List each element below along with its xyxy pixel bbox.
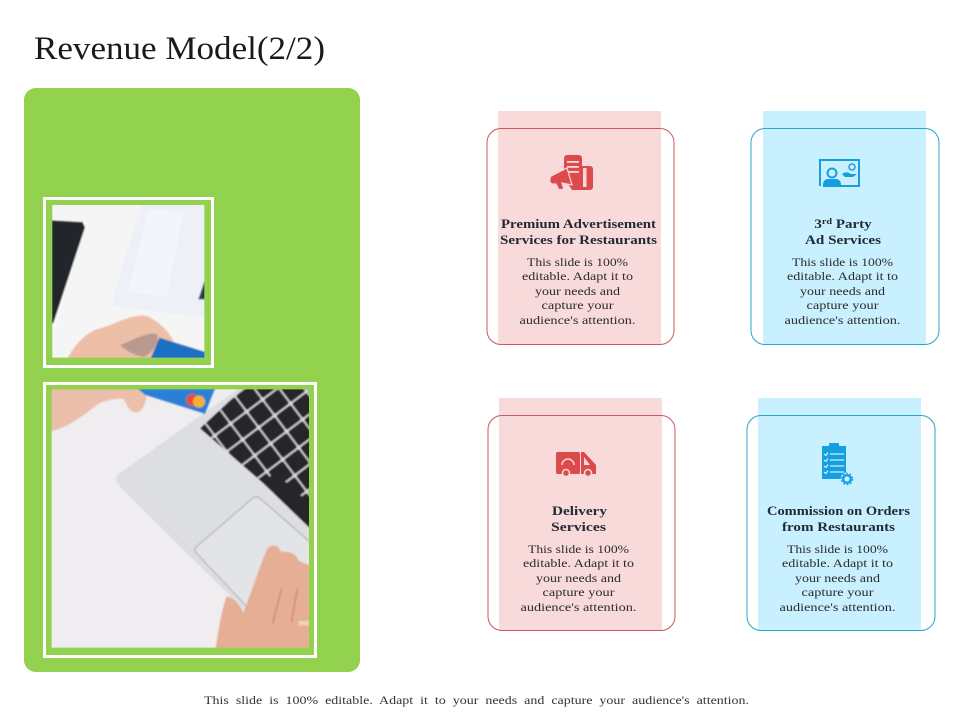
body text: editable. Adapt it to	[523, 556, 634, 570]
body text: audience's attention.	[784, 313, 900, 327]
heading: Commission on Orders	[767, 504, 910, 518]
card: Delivery Services: Services	[551, 520, 606, 534]
body text	[780, 542, 896, 614]
body text: your needs and	[800, 284, 885, 298]
body text: audience's attention.	[780, 600, 896, 614]
body text: your needs and	[536, 571, 621, 585]
card: 3rd Party Ad Services: Ad Services	[805, 233, 881, 247]
icon: presenter with hand and gear	[820, 160, 859, 187]
card: Commission on Orders	[747, 398, 935, 631]
body text: editable. Adapt it to	[782, 556, 893, 570]
body text: your needs and	[535, 284, 620, 298]
card: Delivery Services	[488, 398, 675, 631]
body text	[784, 255, 900, 327]
card: 3rd Party Ad Services	[751, 111, 939, 345]
body text: This slide is 100%	[792, 255, 893, 269]
heading: Delivery	[552, 504, 608, 518]
body text: audience's attention.	[520, 313, 636, 327]
body text: This slide is 100%	[527, 255, 628, 269]
body text: capture your	[542, 298, 614, 312]
title: Revenue Model(2/2)	[34, 31, 325, 67]
body text	[520, 255, 636, 327]
body text: This slide is 100%	[528, 542, 629, 556]
body text: audience's attention.	[520, 600, 636, 614]
body text: capture your	[802, 585, 874, 599]
body text: your needs and	[795, 571, 880, 585]
body text: editable. Adapt it to	[787, 269, 898, 283]
body text	[520, 542, 636, 614]
heading: 3	[814, 217, 822, 231]
card: Premium Advertisement	[487, 111, 674, 345]
icon: clipboard with gear	[822, 443, 854, 486]
photo: hands using laptop with credit card	[44, 384, 316, 656]
heading: Premium Advertisement	[501, 217, 657, 231]
heading: rd	[822, 218, 833, 227]
body text: capture your	[542, 585, 614, 599]
icon: megaphone and document	[550, 155, 593, 190]
icon: delivery truck	[556, 452, 596, 476]
photo: hand holding card on desk	[44, 198, 212, 366]
panel: green photo panel	[24, 88, 360, 672]
footer note: This slide is 100% editable. Adapt it to your needs and capture your audience's attention.	[204, 693, 749, 707]
card: Commission on Orders: from Restaurants	[782, 520, 895, 534]
body text: editable. Adapt it to	[522, 269, 633, 283]
body text: This slide is 100%	[787, 542, 888, 556]
heading: Party	[832, 217, 872, 231]
card: Premium Advertisement: Services for Restaurants	[500, 233, 657, 247]
body text: capture your	[806, 298, 878, 312]
